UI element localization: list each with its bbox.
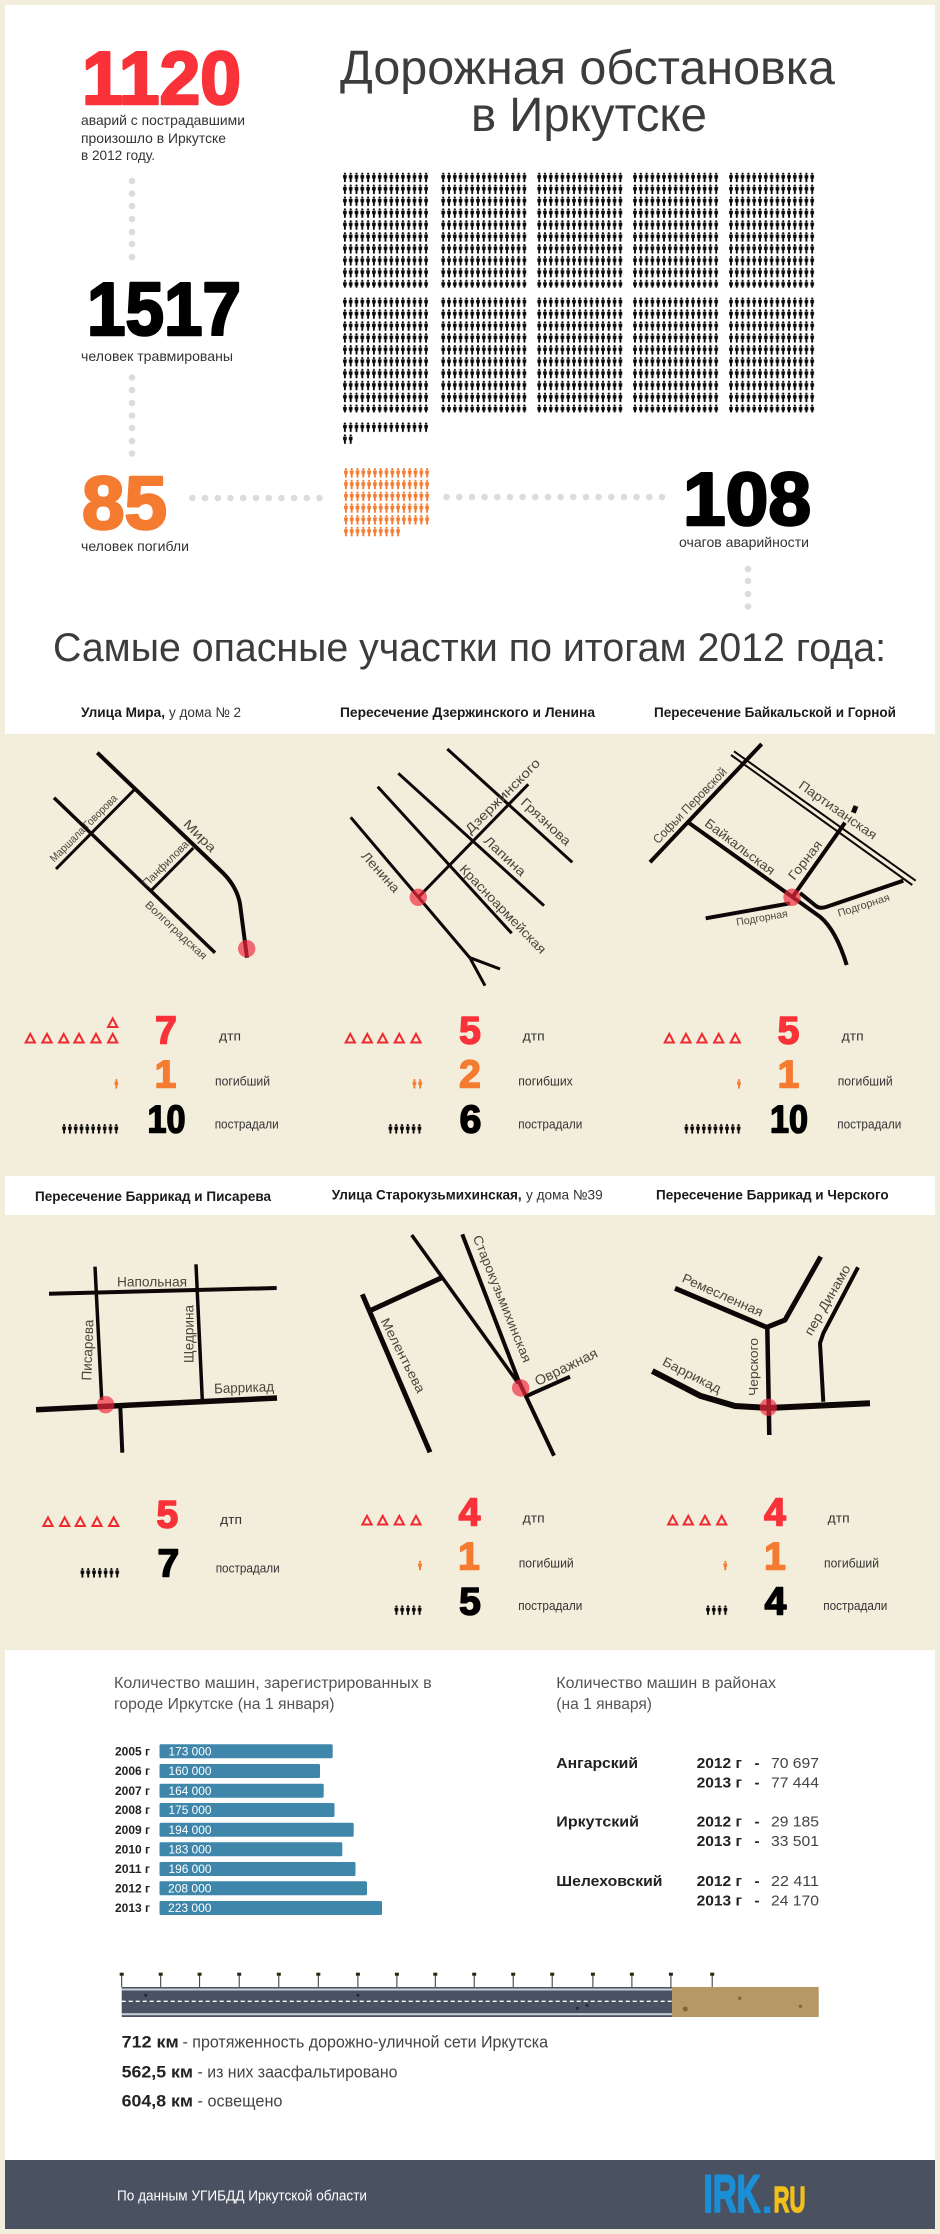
- title: в Иркутске: [471, 89, 707, 142]
- location headings row 1: Улица Мира,: [81, 704, 165, 720]
- map: Старокузьмихинская: Мелентьева: [378, 1315, 429, 1396]
- map: Мира: [48, 753, 255, 962]
- districts table: Иркутский: [556, 1814, 639, 1831]
- stats: Баррикад и Черского: погибший: [824, 1555, 879, 1570]
- map: Дзержинского и Ленина: Красноармейская: [457, 861, 549, 957]
- bar chart: registered cars by year: [115, 1744, 382, 1915]
- stats: Мира: погибший: [215, 1074, 270, 1089]
- road facts: - из них заасфальтировано: [198, 2063, 398, 2081]
- stats: Старокузьмихинская: [362, 1492, 582, 1624]
- districts table: -: [754, 1774, 760, 1791]
- cars chart title: Количество машин, зарегистрированных в: [114, 1675, 432, 1692]
- stats: Баррикад и Писарева: [43, 1494, 280, 1586]
- location headings row 1: Пересечение Байкальской и Горной: [654, 704, 896, 720]
- stats: Байкальская и Горная: пострадали: [837, 1117, 901, 1132]
- map: Байкальская и Горная: Подгорная: [836, 892, 891, 920]
- road facts: 604,8 км: [122, 2093, 193, 2111]
- districts title: [556, 1675, 776, 1713]
- districts table: 22 411: [771, 1873, 819, 1890]
- stats: Дзержинского и Ленина: погибших: [518, 1074, 573, 1089]
- districts table: 33 501: [771, 1833, 819, 1850]
- bar chart: registered cars by year: 2011 г: [115, 1864, 150, 1876]
- stats: Старокузьмихинская: погибший: [519, 1555, 574, 1570]
- bar chart: registered cars by year: 2009 г: [115, 1825, 150, 1837]
- stat: accidents 1120: в 2012 году.: [81, 147, 155, 163]
- map: Баррикад и Черского: Ремесленная: [680, 1270, 765, 1320]
- map: Баррикад и Черского: Черского: [746, 1338, 761, 1396]
- stats: Баррикад и Черского: [668, 1492, 887, 1624]
- section heading: Самые опасные участки по итогам 2012 года:: [53, 626, 886, 670]
- title: Дорожная обстановка: [340, 42, 835, 95]
- white band: location headings row 2: Улица Старокузьмихинская,: [332, 1186, 522, 1202]
- stats: Дзержинского и Ленина: пострадали: [518, 1117, 582, 1132]
- districts title: (на 1 января): [556, 1696, 652, 1713]
- stat: accidents 1120: аварий с пострадавшими: [81, 112, 245, 128]
- location headings row 1: Пересечение Дзержинского и Ленина: [340, 704, 595, 720]
- bar chart: registered cars by year: 194 000: [168, 1825, 212, 1837]
- districts table: 2012 г: [697, 1755, 742, 1772]
- bar chart: registered cars by year: 160 000: [168, 1766, 212, 1778]
- white band: location headings row 2: у дома №39: [526, 1186, 603, 1202]
- stats: Дзержинского и Ленина: 5: [459, 1010, 481, 1052]
- map: Баррикад и Черского: [652, 1257, 870, 1435]
- bar chart: registered cars by year: 2005 г: [115, 1746, 150, 1758]
- road facts: - освещено: [198, 2093, 282, 2111]
- districts table: 2013 г: [697, 1893, 742, 1910]
- stat: accidents 1120: произошло в Иркутске: [81, 130, 226, 146]
- stat: accidents 1120: 1120: [82, 36, 241, 120]
- stats: Дзержинского и Ленина: [346, 1010, 582, 1142]
- bar chart: registered cars by year: 208 000: [168, 1884, 212, 1896]
- map: Байкальская и Горная: Софьи Перовской: [650, 765, 730, 847]
- road facts: 712 км: [122, 2034, 179, 2052]
- pictogram: 85 killed people: [344, 468, 430, 537]
- bar chart: registered cars by year: 2007 г: [115, 1786, 150, 1798]
- title: [340, 42, 835, 142]
- map: Мира: Мира: [181, 816, 220, 856]
- stats: Байкальская и Горная: [665, 1010, 901, 1142]
- logo IRK.RU: IRK: [704, 2165, 760, 2224]
- bar chart: registered cars by year: 196 000: [168, 1864, 212, 1876]
- stat: accidents 1120: [81, 36, 245, 163]
- bar chart: registered cars by year: 2010 г: [115, 1844, 150, 1856]
- footer: [5, 2160, 935, 2229]
- stats: Байкальская и Горная: погибший: [838, 1074, 893, 1089]
- stats: Мира: 1: [155, 1054, 176, 1096]
- districts title: Количество машин в районах: [556, 1675, 776, 1692]
- map: Баррикад и Черского: Баррикад: [660, 1354, 724, 1396]
- districts table: 24 170: [771, 1893, 819, 1910]
- districts table: 2013 г: [697, 1833, 742, 1850]
- dotted connector 1120 to 1517: [129, 178, 135, 260]
- map: Дзержинского и Ленина: Лапина: [481, 833, 530, 880]
- stats: Старокузьмихинская: 5: [459, 1580, 481, 1624]
- map: Мира: Маршала Говорова: [48, 792, 121, 865]
- stats: Баррикад и Писарева: дтп: [220, 1512, 242, 1527]
- pictogram: 1517 injured people: [342, 173, 816, 445]
- stats: Старокузьмихинская: 1: [458, 1536, 480, 1578]
- map: Баррикад и Писарева: Щедрина: [180, 1305, 196, 1363]
- bar chart: registered cars by year: 173 000: [168, 1746, 212, 1758]
- map: Старокузьмихинская: Овражная: [532, 1345, 600, 1389]
- stats: Баррикад и Черского: 4: [764, 1492, 786, 1534]
- stats: Старокузьмихинская: пострадали: [518, 1598, 582, 1613]
- districts table: -: [754, 1873, 760, 1890]
- stats: Баррикад и Черского: 4: [765, 1580, 787, 1624]
- map: Байкальская и Горная: [650, 744, 916, 965]
- map: Дзержинского и Ленина: [351, 749, 575, 986]
- map: Баррикад и Писарева: Баррикад: [214, 1378, 274, 1396]
- bar chart: registered cars by year: 2008 г: [115, 1805, 150, 1817]
- stats: Баррикад и Черского: пострадали: [823, 1598, 887, 1613]
- white band: location headings row 2: Пересечение Баррикад и Писарева: [35, 1188, 271, 1204]
- districts table: 29 185: [771, 1814, 819, 1831]
- districts table: 2012 г: [697, 1873, 742, 1890]
- stats: Дзержинского и Ленина: 6: [460, 1098, 481, 1142]
- panel: cars and roads: [5, 1650, 935, 2160]
- road illustration: [120, 1973, 819, 2017]
- map: Старокузьмихинская: [362, 1233, 600, 1456]
- stats: Мира: 10: [148, 1098, 186, 1142]
- map: Байкальская и Горная: Горная: [785, 837, 825, 883]
- districts table: 2013 г: [697, 1774, 742, 1791]
- stats: Баррикад и Черского: дтп: [828, 1511, 850, 1526]
- dotted connector 108 to section heading: [745, 566, 751, 610]
- districts table: 70 697: [771, 1755, 819, 1772]
- dotted connector orange people to 108: [443, 494, 665, 500]
- districts table: -: [754, 1893, 760, 1910]
- bar chart: registered cars by year: 175 000: [168, 1805, 212, 1817]
- road facts: 562,5 км: [122, 2063, 193, 2081]
- map: Байкальская и Горная: Подгорная: [735, 908, 789, 929]
- bar chart: registered cars by year: 2006 г: [115, 1766, 150, 1778]
- dotted connector 1517 to 85: [129, 374, 135, 457]
- white band: location headings row 2: Пересечение Баррикад и Черского: [656, 1186, 889, 1202]
- location headings row 1: у дома № 2: [169, 704, 241, 720]
- stats: Байкальская и Горная: 10: [770, 1098, 808, 1142]
- districts table: Шелеховский: [556, 1873, 662, 1890]
- stats: Старокузьмихинская: дтп: [523, 1511, 545, 1526]
- map: Мира: Волгоградская: [142, 899, 209, 962]
- stats: Баррикад и Писарева: пострадали: [216, 1561, 280, 1576]
- districts table: -: [754, 1755, 760, 1772]
- stat: killed 85: [81, 461, 189, 554]
- stats: Байкальская и Горная: дтп: [842, 1029, 864, 1044]
- stats: Баррикад и Писарева: 7: [157, 1542, 179, 1586]
- dotted connector 85 to orange people: [189, 495, 323, 501]
- stat: hazard spots 108: 108: [683, 457, 811, 541]
- stats: Баррикад и Писарева: 5: [156, 1494, 178, 1536]
- white band: location headings row 2: [5, 1176, 935, 1215]
- road facts: - протяженность дорожно-уличной сети Иркутска: [182, 2034, 549, 2052]
- stats: Мира: 7: [155, 1010, 177, 1052]
- districts table: Ангарский: [556, 1755, 638, 1772]
- map: Дзержинского и Ленина: Ленина: [358, 848, 404, 896]
- stat: killed 85: человек погибли: [81, 538, 189, 554]
- districts table: 2012 г: [697, 1814, 742, 1831]
- stats: Дзержинского и Ленина: 2: [459, 1054, 481, 1096]
- districts table: 77 444: [771, 1774, 819, 1791]
- stat: killed 85: 85: [82, 461, 167, 545]
- road facts: [122, 2034, 549, 2111]
- stat: hazard spots 108: очагов аварийности: [679, 534, 809, 550]
- map: Мира: Панфилова: [141, 838, 192, 889]
- districts table: [556, 1755, 819, 1910]
- stats: Мира: дтп: [219, 1029, 241, 1044]
- cars chart title: [114, 1675, 432, 1713]
- bar chart: registered cars by year: 2013 г: [115, 1903, 150, 1915]
- map: Баррикад и Черского: пер Динамо: [801, 1262, 854, 1338]
- bar chart: registered cars by year: 223 000: [168, 1903, 212, 1915]
- stats: Байкальская и Горная: 5: [778, 1010, 799, 1052]
- map: Байкальская и Горная: Байкальская: [702, 815, 778, 878]
- logo IRK.RU: .: [762, 2180, 772, 2220]
- panel: headline statistics: [5, 5, 935, 734]
- map: Старокузьмихинская: Старокузьмихинская: [470, 1233, 535, 1365]
- map: Байкальская и Горная: Партизанская: [796, 777, 880, 843]
- districts table: -: [754, 1814, 760, 1831]
- cars chart title: городе Иркутске (на 1 января): [114, 1696, 334, 1713]
- bar chart: registered cars by year: 164 000: [168, 1786, 212, 1798]
- stats: Мира: [26, 1010, 279, 1142]
- source note: По данным УГИБДД Иркутской области: [117, 2189, 367, 2205]
- map: Баррикад и Писарева: Писарева: [78, 1319, 96, 1381]
- map: Дзержинского и Ленина: Дзержинского: [462, 755, 543, 837]
- logo IRK.RU: RU: [774, 2179, 806, 2220]
- stats: Баррикад и Черского: 1: [764, 1536, 786, 1578]
- map: Баррикад и Писарева: Напольная: [117, 1274, 187, 1290]
- stat: injured 1517: 1517: [87, 267, 241, 351]
- stat: injured 1517: человек травмированы: [81, 348, 233, 364]
- bar chart: registered cars by year: 2012 г: [115, 1884, 150, 1896]
- stats: Мира: пострадали: [215, 1117, 279, 1132]
- stats: Дзержинского и Ленина: дтп: [523, 1029, 545, 1044]
- stats: Старокузьмихинская: 4: [459, 1492, 481, 1534]
- districts table: -: [754, 1833, 760, 1850]
- map: Дзержинского и Ленина: Грязнова: [518, 795, 575, 849]
- bar chart: registered cars by year: 183 000: [168, 1844, 212, 1856]
- map: Баррикад и Писарева: [36, 1264, 277, 1453]
- stats: Байкальская и Горная: 1: [778, 1054, 799, 1096]
- location headings row 1: [81, 704, 896, 720]
